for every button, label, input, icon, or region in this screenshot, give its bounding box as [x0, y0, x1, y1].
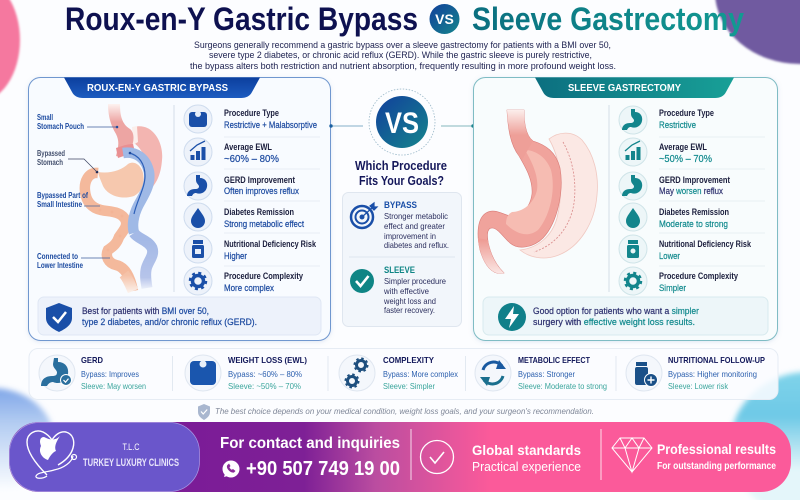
strip item: weight loss: WEIGHT LOSS (EWL)	[228, 355, 307, 365]
row: diabetes remission	[184, 203, 304, 231]
row: sleeve procedure type: Procedure Type	[659, 108, 714, 118]
bypass summary: improvement in	[384, 231, 436, 241]
row: sleeve procedure type	[619, 106, 714, 134]
center comparison box	[342, 192, 462, 326]
disclaimer: The best choice depends on your medical condition, weight loss goals, and your surgeon's recommendation.	[215, 407, 594, 416]
label: small stomach pouch: Small	[37, 113, 53, 122]
sleeve stomach illustration	[478, 110, 597, 273]
footer banner	[9, 422, 791, 492]
strip item: nutritional follow-up: Sleeve: Lower risk	[668, 382, 729, 391]
row: GERD improvement: Often improves reflux	[224, 186, 299, 196]
footer contact: For contact and inquiries	[220, 435, 400, 452]
strip item: complexity: COMPLEXITY	[383, 355, 434, 365]
label: bypassed stomach: Stomach	[37, 158, 63, 167]
panel header: sleeve	[535, 78, 734, 98]
callout: sleeve good option: Good option for patients who want a simpler	[533, 306, 699, 316]
intro paragraph	[190, 40, 616, 72]
footer logo: TURKEY LUXURY CLINICS	[83, 457, 179, 469]
callout: sleeve good option: surgery with effective weight loss results.	[533, 317, 695, 327]
footer contact	[220, 435, 400, 480]
strip item: GERD: Sleeve: May worsen	[81, 382, 146, 391]
label: bypassed small intestine	[37, 191, 100, 209]
row: GERD improvement: GERD Improvement	[224, 175, 295, 185]
footer global standards	[420, 440, 581, 474]
row: sleeve complexity: Simpler	[659, 283, 686, 293]
bypass summary: diabetes and reflux.	[384, 240, 449, 250]
row: sleeve diabetes: Moderate to strong	[659, 219, 728, 229]
sleeve summary: faster recovery.	[384, 305, 435, 315]
row: sleeve average EWL: ~50% – 70%	[659, 154, 712, 165]
strip item: weight loss: Sleeve: ~50% – 70%	[228, 382, 301, 391]
strip item: GERD: Bypass: Improves	[81, 370, 139, 379]
row: average EWL: Average EWL	[224, 142, 272, 152]
row: sleeve nutrition	[619, 235, 752, 263]
row: procedure type	[184, 105, 317, 133]
row: average EWL	[184, 138, 279, 166]
label: bypassed stomach: Bypassed	[37, 149, 65, 158]
center column: VS badge: VS	[385, 107, 419, 140]
intro paragraph: the bypass alters both restriction and nutrient absorption, frequently resulting in more profound weight loss.	[190, 61, 616, 72]
row: sleeve GERD	[619, 172, 730, 200]
bypass anatomy illustration	[85, 104, 162, 291]
row: nutritional deficiency risk	[184, 235, 317, 263]
strip item: GERD: GERD	[81, 355, 103, 365]
sleeve summary: Simpler procedure	[384, 276, 446, 286]
callout: bypass best for	[38, 297, 321, 335]
panel: Roux-en-Y gastric bypass	[28, 78, 330, 340]
row: sleeve complexity: Procedure Complexity	[659, 271, 738, 281]
row: sleeve diabetes	[619, 203, 729, 231]
label: connected to lower intestine: Connected to	[37, 252, 78, 261]
intro paragraph: Surgeons generally recommend a gastric bypass over a sleeve gastrectomy for patients with a BMI over 50,	[194, 40, 611, 51]
title: Roux-en-Y Gastric Bypass	[65, 1, 418, 37]
title: VS	[435, 11, 454, 27]
panel header: sleeve: SLEEVE GASTRECTOMY	[568, 83, 681, 94]
footer global standards: Global standards	[472, 442, 581, 458]
footer professional results	[612, 438, 776, 472]
center heading: Fits Your Goals?	[359, 173, 444, 188]
strip item: complexity	[339, 355, 458, 391]
row: sleeve nutrition: Nutritional Deficiency Risk	[659, 239, 752, 249]
strip item: weight loss: Bypass: ~60% – 80%	[228, 370, 302, 379]
label: small stomach pouch	[37, 113, 117, 131]
bypass summary: BYPASS	[384, 200, 417, 210]
center heading	[355, 158, 447, 188]
strip item: complexity: Sleeve: Simpler	[383, 382, 435, 391]
label: bypassed stomach	[37, 149, 97, 172]
center column: VS badge	[329, 89, 475, 155]
bottom comparison strip	[29, 348, 778, 400]
bypass summary	[351, 200, 449, 250]
row: sleeve nutrition: Lower	[659, 251, 680, 261]
row: diabetes remission: Strong metabolic effect	[224, 219, 304, 229]
sleeve summary: with effective	[383, 286, 429, 296]
title	[65, 1, 744, 37]
label: bypassed small intestine: Bypassed Part of	[37, 191, 88, 200]
label: connected to lower intestine	[37, 252, 110, 270]
row: GERD improvement	[184, 172, 299, 200]
row: sleeve average EWL	[619, 138, 712, 166]
footer professional results: For outstanding performance	[657, 461, 776, 472]
row: procedure complexity	[184, 267, 303, 295]
footer contact: +90 507 749 19 00	[246, 458, 400, 480]
row: nutritional deficiency risk: Nutritional Deficiency Risk	[224, 239, 317, 249]
panel: sleeve gastrectomy	[474, 78, 778, 340]
panel header: bypass: ROUX-EN-Y GASTRIC BYPASS	[87, 83, 228, 94]
callout: sleeve good option	[483, 297, 768, 335]
callout: bypass best for: type 2 diabetes, and/or chronic reflux (GERD).	[82, 317, 257, 327]
strip item: weight loss	[185, 355, 307, 391]
row: procedure complexity: More complex	[224, 283, 274, 293]
row: average EWL: ~60% – 80%	[224, 154, 279, 165]
strip item: nutritional follow-up	[626, 355, 765, 391]
row: sleeve procedure type: Restrictive	[659, 120, 696, 130]
row: nutritional deficiency risk: Higher	[224, 251, 247, 261]
label: small stomach pouch: Stomach Pouch	[37, 122, 84, 131]
footer logo	[10, 422, 200, 492]
row: sleeve GERD: May worsen reflux	[659, 186, 723, 196]
intro paragraph: severe type 2 diabetes, or chronic acid reflux (GERD). While the gastric sleeve is purely restrictive,	[209, 50, 592, 61]
strip item: complexity: Bypass: More complex	[383, 370, 458, 379]
title: Sleeve Gastrectomy	[472, 1, 744, 37]
center heading: Which Procedure	[355, 158, 447, 173]
row: procedure complexity: Procedure Complexity	[224, 271, 303, 281]
panel header: bypass	[64, 78, 260, 98]
strip item: metabolic effect	[475, 355, 607, 391]
footer professional results: Professional results	[657, 441, 776, 457]
row: diabetes remission: Diabetes Remission	[224, 207, 294, 217]
label: bypassed small intestine: Small Intestine	[37, 200, 82, 209]
label: connected to lower intestine: Lower Intestine	[37, 261, 83, 270]
sleeve summary	[350, 265, 446, 315]
strip item: GERD	[39, 355, 146, 391]
row: sleeve GERD: GERD Improvement	[659, 175, 730, 185]
row: sleeve average EWL: Average EWL	[659, 142, 707, 152]
row: procedure type: Restrictive + Malabsorptive	[224, 120, 317, 130]
strip item: metabolic effect: METABOLIC EFFECT	[518, 355, 591, 365]
footer logo: T.L.C	[122, 442, 140, 452]
row: sleeve diabetes: Diabetes Remission	[659, 207, 729, 217]
callout: bypass best for: Best for patients with BMI over 50,	[82, 306, 209, 316]
strip item: nutritional follow-up: NUTRITIONAL FOLLOW-UP	[668, 355, 765, 365]
disclaimer	[198, 404, 594, 420]
row: procedure type: Procedure Type	[224, 108, 279, 118]
row: sleeve complexity	[619, 267, 738, 295]
sleeve summary: SLEEVE	[384, 265, 415, 275]
strip item: metabolic effect: Bypass: Stronger	[518, 370, 575, 379]
bypass summary: effect and greater	[384, 221, 445, 231]
strip item: metabolic effect: Sleeve: Moderate to strong	[518, 382, 607, 391]
footer global standards: Practical experience	[472, 459, 581, 474]
sleeve summary: weight loss and	[383, 296, 436, 306]
bypass summary: Stronger metabolic	[384, 211, 449, 221]
strip item: nutritional follow-up: Bypass: Higher monitoring	[668, 370, 757, 379]
